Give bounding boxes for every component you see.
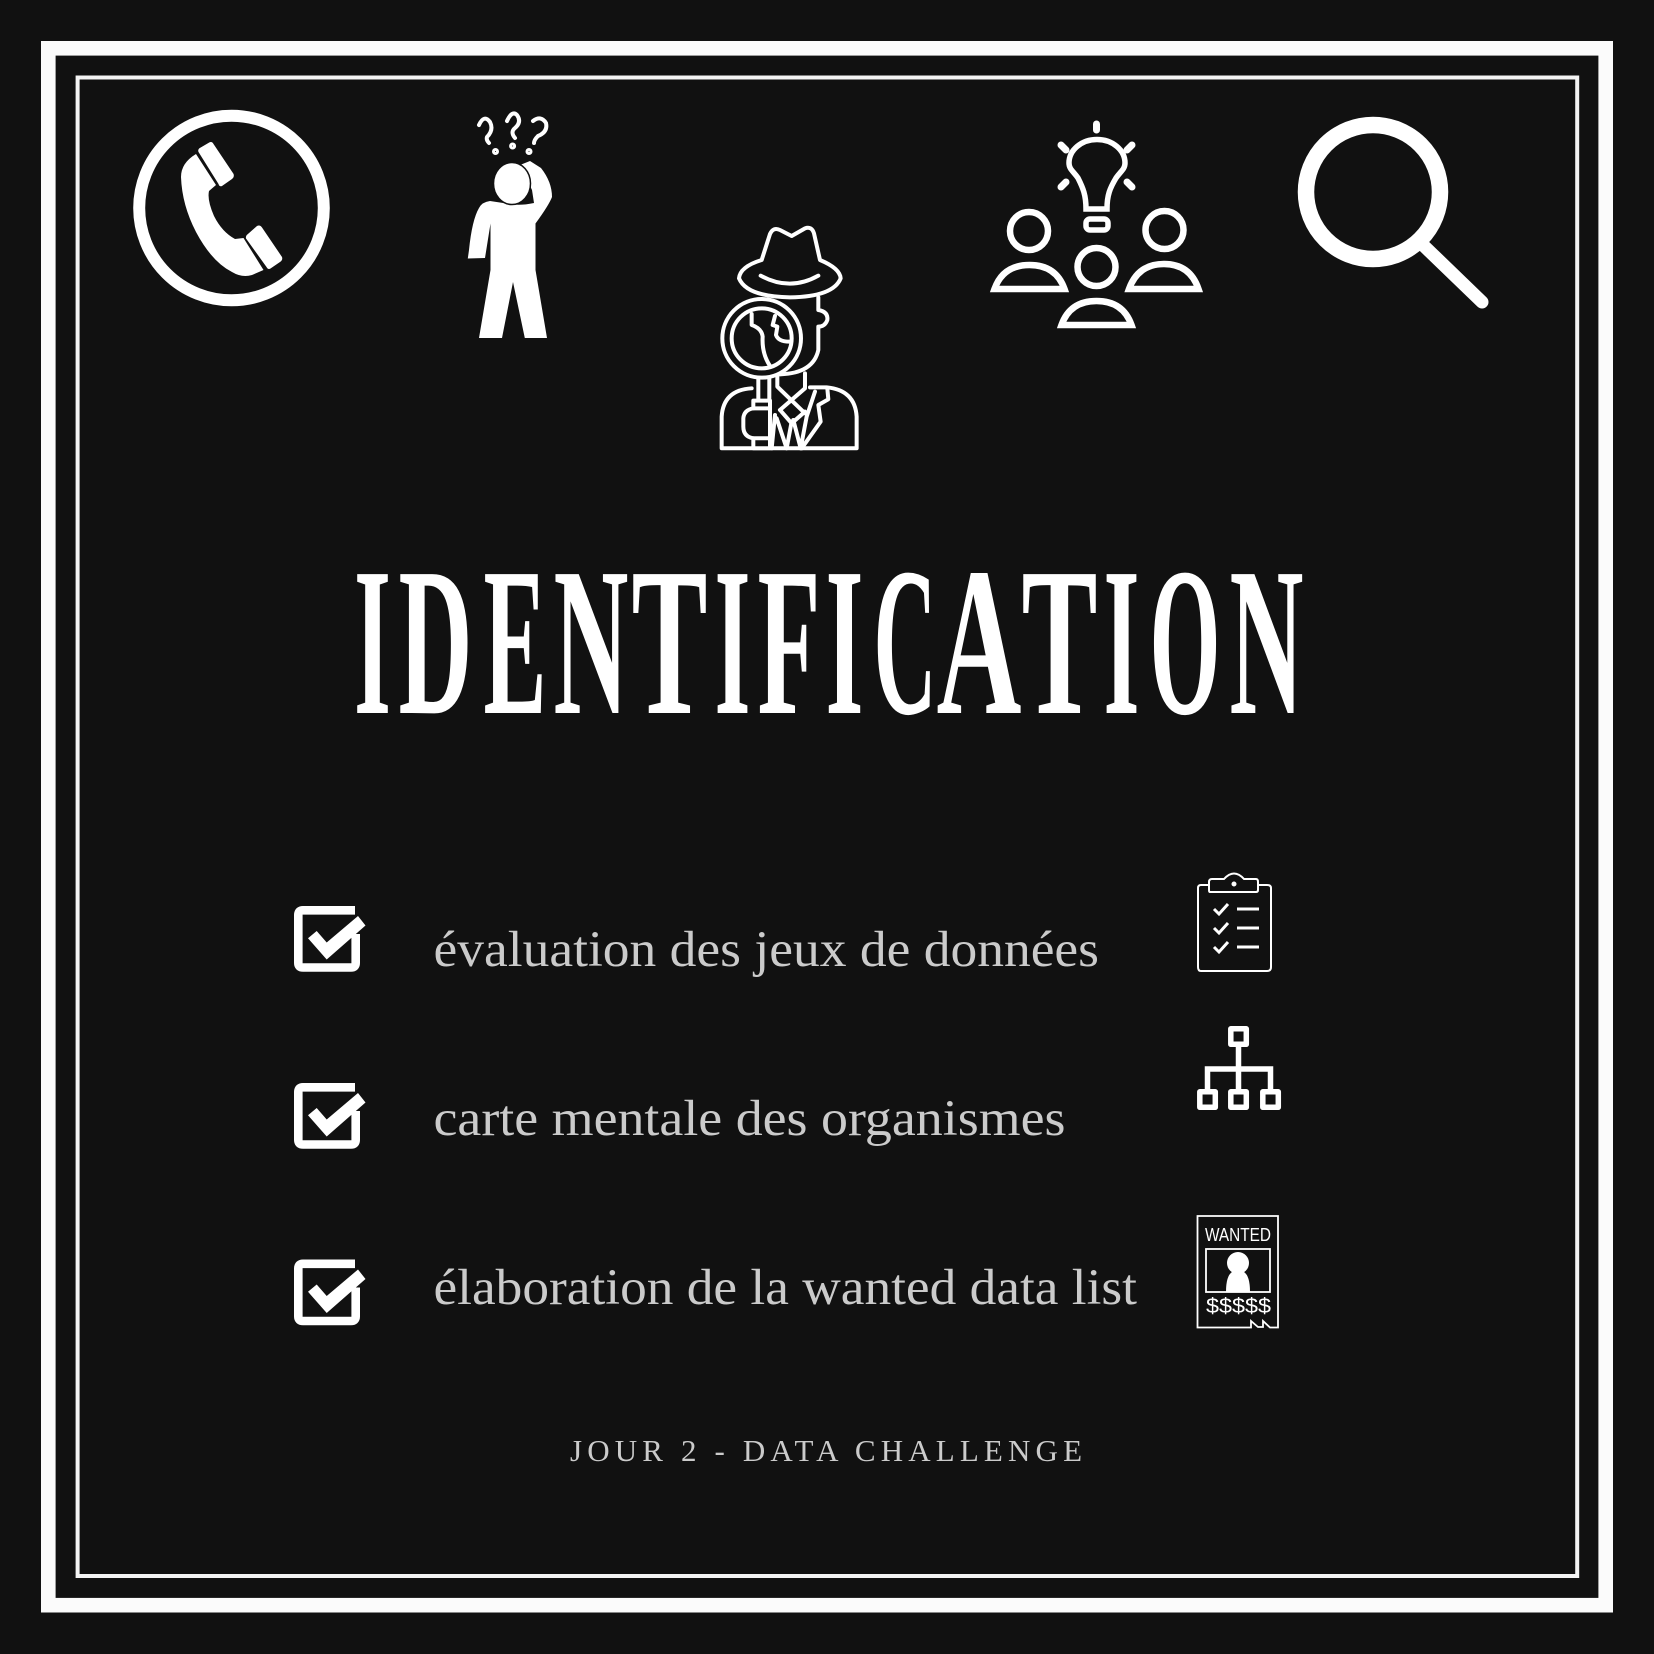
title: A [936,524,1022,759]
bulb [1069,140,1125,209]
icon: wanted poster: WANTED [1205,1225,1271,1245]
checklist item 3: élaboration de la wanted data list [434,1260,1137,1316]
checklist item 2: carte mentale des organismes [434,1091,1066,1147]
icon: clipboard checklist [1198,874,1271,971]
icon: magnifying glass [1306,125,1482,302]
magnifier handle [758,378,769,401]
icon: wanted poster [1198,1216,1278,1328]
icon: wanted poster: $$$$$ [1206,1295,1271,1318]
people [1010,212,1048,250]
title: I [826,524,864,759]
title: I [1104,524,1140,759]
title: C [874,524,936,759]
icon: checkbox [298,1264,366,1321]
question marks [479,113,546,153]
title: E [484,524,546,759]
checklist item 1: évaluation des jeux de données [434,922,1099,978]
title: T [632,524,708,759]
title: O [1150,524,1220,759]
neck and collar [777,373,805,413]
hat [739,228,841,297]
title: T [1022,524,1098,759]
magnifier lens with globe [722,299,801,378]
checklist item 1 [298,910,1099,978]
rays [1061,124,1132,187]
title: N [554,524,628,759]
jacket [722,387,857,448]
infographic canvas: N [1230,524,1304,759]
title: D [398,524,472,759]
icon: puzzled person with question marks [468,113,552,338]
title: I [354,524,391,759]
head and ear [780,297,827,374]
icon: organisation chart [1200,1029,1278,1107]
icon: team with lightbulb idea [994,124,1198,325]
icon: checkbox [298,1087,366,1144]
title: I [714,524,750,759]
icon: detective with magnifying glass [722,228,857,448]
title: F [758,524,820,759]
icon: telephone in circle [139,116,324,300]
icon: checkbox [298,910,366,968]
checklist [298,910,1137,1321]
footer caption: JOUR 2 - DATA CHALLENGE [570,1433,1082,1468]
